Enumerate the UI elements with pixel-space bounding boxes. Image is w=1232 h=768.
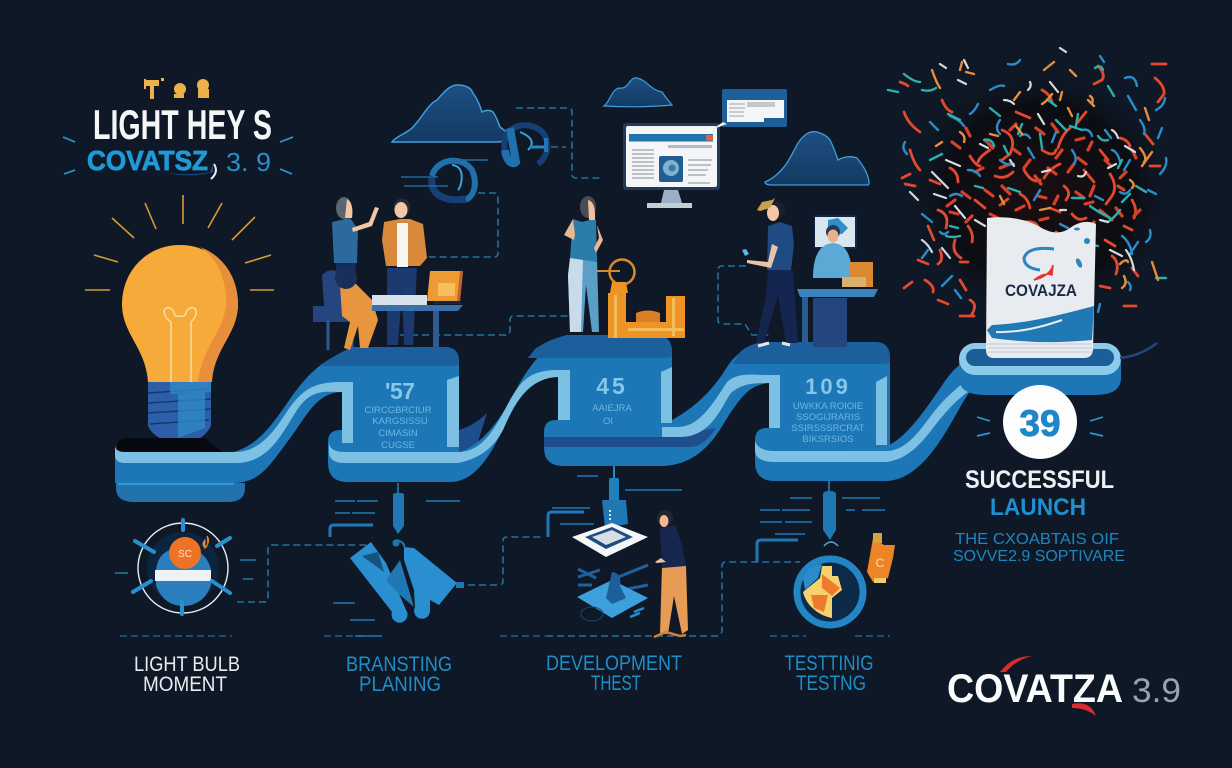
small marks	[630, 608, 644, 617]
label: testing: TESTNG	[796, 672, 866, 695]
stem 1	[397, 483, 399, 495]
stat 45: 45	[596, 373, 628, 399]
pillar text: step 3	[791, 374, 865, 445]
label: development test	[546, 652, 682, 695]
icon: light bulb	[85, 195, 274, 443]
icon: small gold glyphs	[144, 78, 209, 99]
ribbon segment 4 rise	[755, 363, 985, 481]
step 1 description	[364, 405, 432, 451]
launch description: THE CXOABTAIS OIF	[955, 531, 1119, 548]
label: branding planning	[346, 653, 452, 696]
ribbon segment 3 light strip	[662, 375, 780, 437]
ribbon segment 1 base	[116, 483, 245, 502]
people: development step	[564, 196, 685, 338]
bottom-right logo	[947, 656, 1181, 716]
connecting dashed lines	[120, 108, 890, 636]
pillar text: step 1	[364, 378, 432, 451]
package logo swoosh	[1024, 248, 1054, 270]
instrument box	[602, 500, 628, 528]
monitor frame	[623, 123, 720, 190]
bulb screw base	[148, 382, 211, 443]
right blade	[404, 547, 457, 619]
icon: step 2 branching tools	[350, 540, 464, 623]
label: development test: DEVELOPMENT	[546, 652, 682, 675]
man with phone	[742, 198, 798, 346]
step 3 description	[791, 401, 865, 445]
stem 2	[613, 466, 615, 480]
navy wedge	[459, 413, 487, 452]
title line: LIGHT HEY S	[93, 101, 272, 148]
ribbon segment 1 rise and platform	[115, 347, 459, 483]
dense red core	[947, 124, 1140, 234]
step 1 description: KARGSISSU	[372, 416, 428, 427]
step labels	[134, 652, 874, 696]
subtitle brand: COVATSZ	[87, 145, 208, 176]
clouds and swirls	[392, 78, 869, 200]
confetti burst	[888, 48, 1175, 325]
light platform shadow	[117, 438, 222, 452]
step 2 description	[592, 403, 632, 427]
stem 3	[828, 481, 830, 494]
stat 57: '57	[385, 378, 415, 404]
launch description line 2: SOVVE2.9 SOPTIVARE	[953, 548, 1125, 565]
badge accents	[977, 417, 1103, 436]
claw	[824, 542, 838, 546]
callout: launch stat 39	[953, 385, 1125, 565]
step 2 description: OI	[603, 416, 613, 427]
joint	[456, 582, 464, 588]
bulb rays	[85, 195, 274, 290]
step 1 description: CIMASIN	[378, 428, 418, 439]
ribbon segment 2 light strip	[115, 382, 342, 463]
accent dashes	[63, 137, 293, 174]
decorative tick lines	[333, 476, 885, 636]
brand underline accent	[168, 164, 213, 175]
side ticks	[115, 560, 256, 579]
label: light bulb moment: MOMENT	[143, 673, 227, 696]
stat 109: 109	[805, 374, 851, 399]
launch heading: SUCCESSFUL	[965, 466, 1114, 494]
connector stubs	[330, 512, 798, 562]
blue plate	[577, 580, 648, 618]
red confetti	[900, 64, 1166, 316]
label: light bulb moment	[134, 653, 240, 696]
icon: step 1 idea medallion	[115, 520, 256, 614]
blue confetti	[903, 56, 1166, 312]
icon: step 1 idea medallion: SC	[178, 549, 192, 560]
bulb shade	[198, 247, 238, 382]
text lines	[632, 146, 712, 183]
step 1 description: CUGSE	[381, 440, 415, 451]
pivot	[392, 540, 400, 546]
package brand name: COVAJZA	[1005, 281, 1077, 300]
cloud right	[765, 132, 869, 185]
orange head	[169, 537, 201, 569]
people: brainstorming team	[313, 197, 463, 350]
bulb filament	[164, 308, 196, 382]
cloud middle	[604, 78, 672, 107]
process ribbon	[115, 335, 1157, 502]
bulb glass	[122, 245, 238, 382]
launch heading blue: LAUNCH	[990, 494, 1086, 521]
label: light bulb moment: LIGHT BULB	[134, 653, 240, 676]
lens contents	[803, 566, 842, 618]
monitor screen	[626, 126, 717, 187]
label: testing	[784, 652, 874, 695]
product package	[986, 217, 1096, 358]
seated developer with monitor	[797, 215, 878, 347]
medallion ring	[138, 523, 228, 613]
white band	[155, 570, 211, 581]
step 2 description: AAIEJRA	[592, 403, 632, 414]
stems under pedestals	[333, 466, 885, 636]
orange tag icon	[867, 538, 895, 582]
ribbon segment 3 pedestal and rise	[544, 342, 890, 466]
package wave	[987, 306, 1094, 342]
tools	[578, 565, 648, 590]
left blade	[350, 542, 408, 623]
stat number: 39	[1019, 403, 1061, 444]
version number: 3. 9	[226, 147, 271, 177]
label: branding planning: PLANING	[359, 673, 441, 696]
blue core	[156, 548, 211, 606]
icon: step 4 testing lens: C	[876, 556, 885, 570]
thumbnail	[659, 156, 683, 182]
label: testing: TESTTINIG	[784, 652, 874, 675]
icon: step 4 testing lens	[797, 533, 895, 625]
confetti shadow	[905, 65, 1175, 325]
step 1 description: CIRCGBRCIUR	[364, 405, 432, 416]
logo version: 3.9	[1132, 672, 1181, 710]
label: development test: THEST	[591, 672, 641, 695]
package body	[986, 217, 1096, 358]
people: testing step	[742, 198, 878, 347]
stand	[661, 190, 682, 203]
dialog card	[711, 89, 787, 130]
orange machine	[597, 260, 685, 338]
final platform	[959, 343, 1157, 395]
woman pointing	[332, 197, 379, 292]
flame	[203, 536, 209, 548]
package flecks	[1074, 228, 1090, 269]
swirl gear upper	[504, 125, 547, 164]
lens ring	[797, 559, 863, 625]
logo swooshes	[1000, 656, 1032, 672]
white plate	[572, 523, 648, 557]
monitor mockup	[623, 123, 720, 208]
ribbon segment 4 light strip	[755, 382, 971, 462]
white confetti	[910, 48, 1135, 270]
step 3 description: SSIRSSSRCRAT	[791, 423, 865, 434]
logo wordmark: COVATZA	[947, 667, 1123, 711]
standing woman	[564, 196, 603, 332]
teal confetti	[888, 66, 1166, 278]
ribbon segment 2 pedestal and rise	[328, 335, 672, 482]
step 3 description: SSOGIJRARIS	[796, 412, 860, 423]
pillar text: step 2	[592, 373, 632, 427]
man in orange jacket	[382, 198, 427, 345]
desk and laptop	[372, 271, 463, 350]
cloud left	[392, 85, 512, 142]
white badge	[1003, 385, 1077, 459]
swirl gear lower	[401, 160, 488, 200]
orange confetti	[932, 62, 1158, 288]
title block	[63, 78, 293, 179]
seated woman and chair	[313, 267, 378, 350]
developer figure	[654, 510, 688, 637]
step 3 description: UWKKA ROIOIE	[793, 401, 863, 412]
step 3 description: BIKSRSIOS	[802, 434, 854, 445]
icon: step 3 isometric build	[572, 500, 688, 637]
label: branding planning: BRANSTING	[346, 653, 452, 676]
spokes	[133, 520, 230, 614]
header bar	[629, 134, 713, 142]
